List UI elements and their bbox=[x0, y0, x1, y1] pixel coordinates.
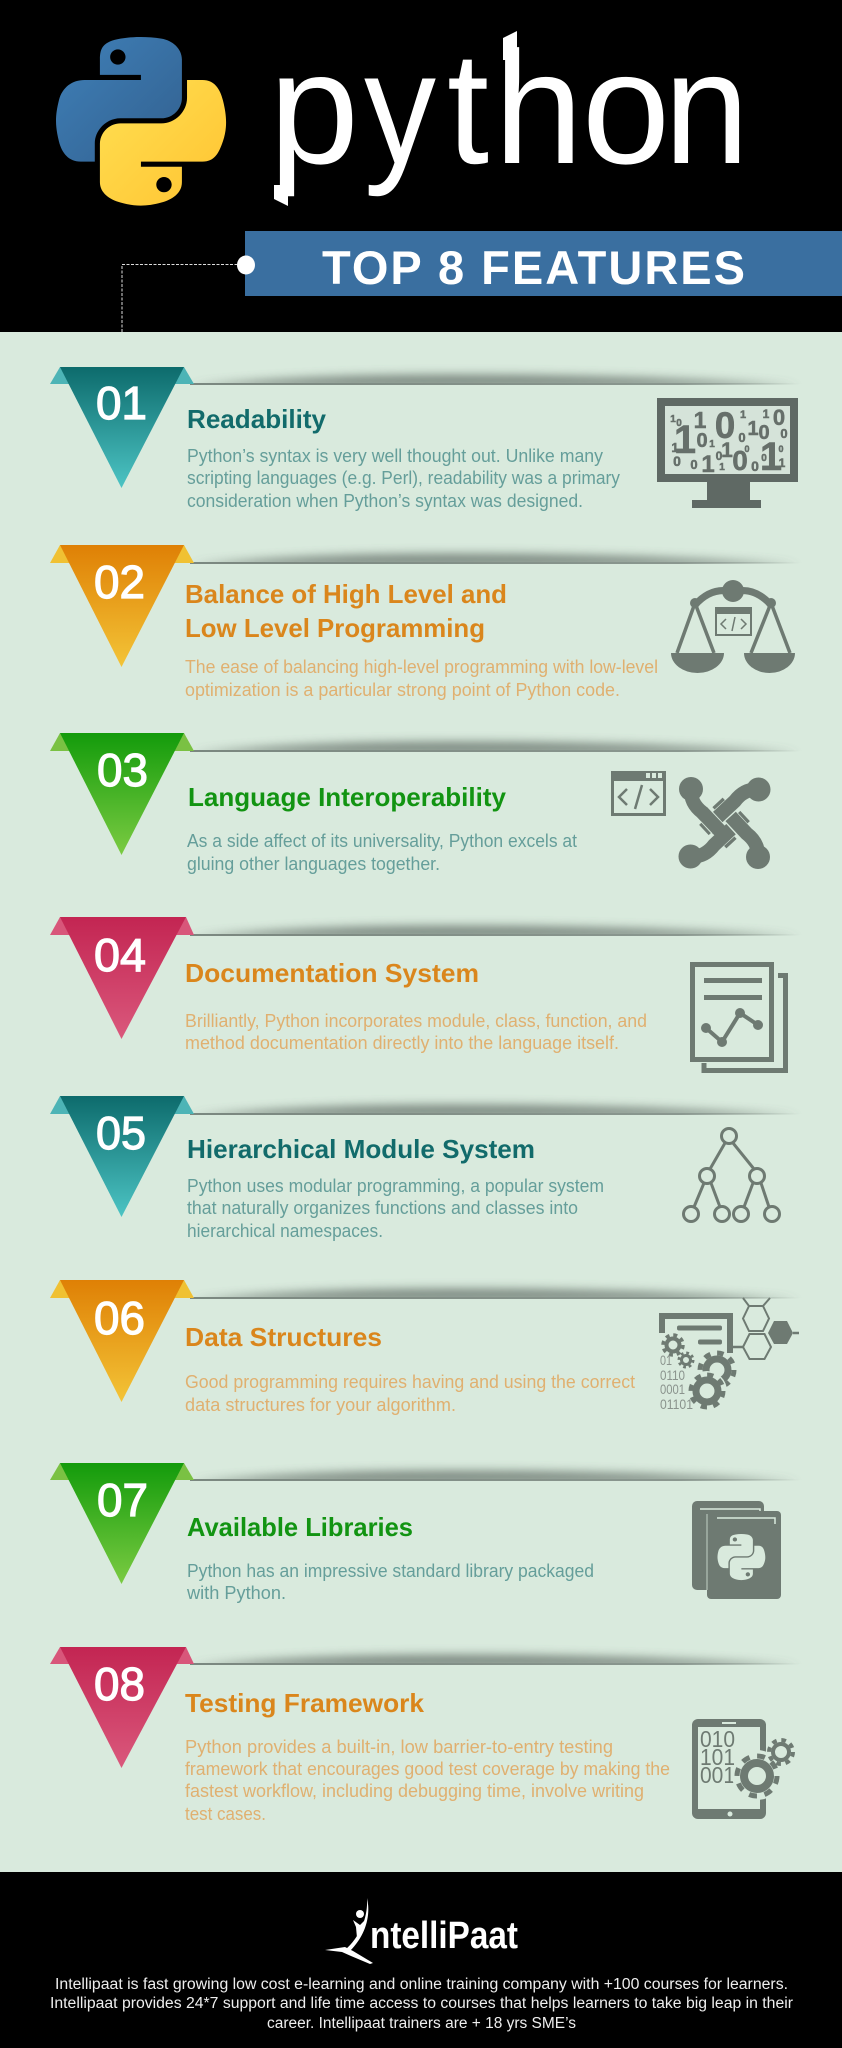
body text: Python has an impressive standard library packaged bbox=[187, 1561, 594, 1581]
body text: As a side affect of its universality, Python excels at bbox=[187, 831, 577, 851]
icon: monitor with binary: 0 bbox=[773, 405, 785, 430]
body text bbox=[185, 1737, 670, 1824]
company description: career. Intellipaat trainers are + 18 yrs SME’s bbox=[267, 2015, 576, 2032]
panel: 01 readability bbox=[50, 367, 800, 511]
icon: data gears and hexagons: 0001 bbox=[660, 1381, 685, 1397]
body text: framework that encourages good test coverage by making the bbox=[185, 1759, 670, 1779]
badge 03 bbox=[50, 733, 194, 855]
title: python wordmark: t bbox=[447, 18, 489, 197]
icon: monitor with binary: 0 bbox=[690, 457, 698, 472]
divider shadow bbox=[190, 1655, 800, 1667]
icon: monitor with binary: 0 bbox=[744, 444, 750, 454]
body text: method documentation directly into the language itself. bbox=[185, 1033, 619, 1053]
badge 01 bbox=[50, 367, 194, 488]
badge 02 bbox=[50, 545, 194, 667]
title: python wordmark: n bbox=[664, 18, 749, 197]
badge 01: 01 bbox=[96, 377, 147, 429]
icon: monitor with binary: 0 bbox=[778, 444, 784, 454]
body text: test cases. bbox=[185, 1804, 266, 1824]
icon: tablet with gears: 010 bbox=[700, 1726, 735, 1752]
icon: monitor with binary bbox=[661, 402, 794, 508]
icon: python logo bbox=[56, 37, 226, 206]
icon: monitor with binary: 1 bbox=[709, 439, 715, 450]
icon: monitor with binary: 0 bbox=[716, 449, 723, 463]
icon: monitor with binary: 1 bbox=[779, 456, 786, 470]
icon: tablet with gears bbox=[692, 1719, 793, 1819]
body text: consideration when Python’s syntax was designed. bbox=[187, 491, 583, 511]
body text bbox=[185, 657, 658, 700]
divider shadow bbox=[190, 375, 800, 387]
body text bbox=[185, 1011, 647, 1053]
icon: monitor with binary: 1 bbox=[670, 414, 676, 425]
body text: scripting languages (e.g. Perl), readability was a primary bbox=[187, 468, 620, 488]
icon: monitor with binary: 0 bbox=[738, 430, 746, 445]
badge 07: 07 bbox=[97, 1474, 148, 1526]
icon: monitor with binary: 1 bbox=[719, 462, 725, 473]
heading: Hierarchical Module System bbox=[187, 1134, 535, 1164]
body text: Python’s syntax is very well thought out. Unlike many bbox=[187, 446, 603, 466]
badge 04 bbox=[50, 917, 194, 1039]
divider shadow bbox=[190, 1105, 800, 1117]
body text: data structures for your algorithm. bbox=[185, 1395, 456, 1415]
heading bbox=[185, 579, 507, 643]
body text bbox=[187, 1176, 604, 1241]
divider shadow bbox=[190, 742, 800, 754]
badge 07 bbox=[50, 1463, 194, 1584]
divider shadow bbox=[190, 926, 800, 938]
icon: monitor with binary: 0 bbox=[715, 405, 735, 446]
company description bbox=[50, 1976, 793, 2032]
heading: Data Structures bbox=[185, 1322, 382, 1352]
divider shadow bbox=[190, 554, 800, 566]
panel: 06 data structures bbox=[50, 1280, 800, 1415]
icon: monitor with binary: 1 bbox=[694, 407, 707, 433]
heading: Testing Framework bbox=[185, 1688, 425, 1718]
icon: monitor with binary: 0 bbox=[761, 453, 767, 464]
icon: monitor with binary: 0 bbox=[751, 458, 759, 474]
badge 05: 05 bbox=[96, 1107, 146, 1159]
icon: monitor with binary: 1 bbox=[747, 418, 759, 440]
title: python wordmark: y bbox=[364, 18, 436, 197]
icon: code window bbox=[611, 771, 666, 814]
body text: hierarchical namespaces. bbox=[187, 1221, 383, 1241]
icon: monitor with binary: 0 bbox=[676, 418, 682, 429]
heading: Available Libraries bbox=[187, 1512, 413, 1542]
badge 08 bbox=[50, 1647, 194, 1768]
panel: 03 interoperability bbox=[50, 733, 800, 874]
badge 06: 06 bbox=[94, 1292, 145, 1344]
body text: optimization is a particular strong point of Python code. bbox=[185, 680, 620, 700]
panel: 08 testing bbox=[50, 1647, 800, 1824]
icon: monitor with binary: 1 bbox=[760, 435, 782, 479]
banner: top 8 features: TOP 8 FEATURES bbox=[322, 241, 745, 294]
heading: Balance of High Level and bbox=[185, 579, 507, 609]
panel: 05 hierarchical bbox=[50, 1096, 800, 1241]
content background bbox=[0, 332, 842, 1872]
icon: monitor with binary: 1 bbox=[671, 440, 679, 455]
icon: monitor with binary: 1 bbox=[721, 439, 733, 462]
icon: monitor with binary: 1 bbox=[740, 409, 746, 421]
company description: Intellipaat provides 24*7 support and life time access to courses that helps learners to take big leap in their bbox=[50, 1995, 793, 2012]
badge 06 bbox=[50, 1280, 194, 1402]
logo: intellipaat: ntelliPaat bbox=[370, 1915, 518, 1957]
divider shadow bbox=[190, 1289, 800, 1301]
badge 03: 03 bbox=[97, 744, 148, 796]
body text bbox=[186, 1561, 594, 1603]
icon: monitor with binary: 0 bbox=[696, 430, 708, 452]
icon: monitor with binary: 0 bbox=[673, 453, 681, 469]
body text: gluing other languages together. bbox=[187, 854, 440, 874]
badge 04: 04 bbox=[94, 929, 146, 981]
body text: Brilliantly, Python incorporates module, class, function, and bbox=[185, 1011, 647, 1031]
connector: dashed line and dot bbox=[122, 256, 255, 332]
body text bbox=[187, 831, 577, 874]
panel: 02 balance bbox=[50, 545, 800, 700]
badge 08: 08 bbox=[94, 1658, 145, 1710]
title: python wordmark: h bbox=[494, 18, 583, 197]
heading: Language Interoperability bbox=[188, 782, 507, 812]
title: python wordmark: p bbox=[269, 18, 359, 197]
body text: Good programming requires having and using the correct bbox=[185, 1372, 635, 1392]
body text: Python provides a built-in, low barrier-to-entry testing bbox=[185, 1737, 613, 1757]
icon: joomla knot bbox=[678, 777, 770, 869]
icon: balance scale bbox=[671, 580, 795, 673]
title: python wordmark: o bbox=[582, 18, 670, 197]
body text bbox=[187, 446, 620, 511]
banner: top 8 features bbox=[245, 231, 842, 296]
title: python wordmark bbox=[269, 18, 749, 206]
panel: 04 documentation bbox=[50, 917, 800, 1070]
heading: Documentation System bbox=[185, 958, 479, 988]
icon: python books bbox=[692, 1501, 781, 1599]
icon: monitor with binary: 1 bbox=[763, 407, 770, 421]
icon: tablet with gears: 001 bbox=[700, 1762, 735, 1788]
icon: monitor with binary: 0 bbox=[758, 422, 770, 444]
body text: that naturally organizes functions and classes into bbox=[187, 1198, 578, 1218]
icon: data gears and hexagons: 0110 bbox=[660, 1367, 685, 1383]
icon: data gears and hexagons bbox=[660, 1298, 799, 1412]
heading: Low Level Programming bbox=[185, 613, 485, 643]
icon: data gears and hexagons: 01101 bbox=[660, 1396, 693, 1412]
panel: 07 libraries bbox=[50, 1463, 800, 1603]
heading: Readability bbox=[187, 404, 327, 434]
body text: Python uses modular programming, a popular system bbox=[187, 1176, 604, 1196]
header background bbox=[0, 0, 842, 332]
icon: tablet with gears: 101 bbox=[700, 1744, 735, 1770]
badge 02: 02 bbox=[94, 556, 145, 608]
body text: with Python. bbox=[186, 1583, 286, 1603]
icon: monitor with binary: 0 bbox=[732, 445, 748, 476]
logo: intellipaat bbox=[325, 1898, 518, 1964]
company description: Intellipaat is fast growing low cost e-learning and online training company with +100 courses for learners. bbox=[55, 1976, 788, 1993]
body text bbox=[185, 1372, 635, 1415]
badge 05 bbox=[50, 1096, 194, 1217]
icon: document with chart bbox=[692, 964, 786, 1070]
body text: fastest workflow, including debugging time, involve writing bbox=[185, 1781, 644, 1801]
icon: tree hierarchy bbox=[684, 1128, 780, 1222]
divider shadow bbox=[190, 1471, 800, 1483]
footer bbox=[0, 1872, 842, 2048]
icon: monitor with binary: 1 bbox=[701, 451, 715, 478]
icon: data gears and hexagons: 01 bbox=[660, 1352, 672, 1368]
icon: monitor with binary: 0 bbox=[780, 426, 788, 441]
icon: monitor with binary: 1 bbox=[674, 418, 696, 462]
body text: The ease of balancing high-level programming with low-level bbox=[185, 657, 658, 677]
